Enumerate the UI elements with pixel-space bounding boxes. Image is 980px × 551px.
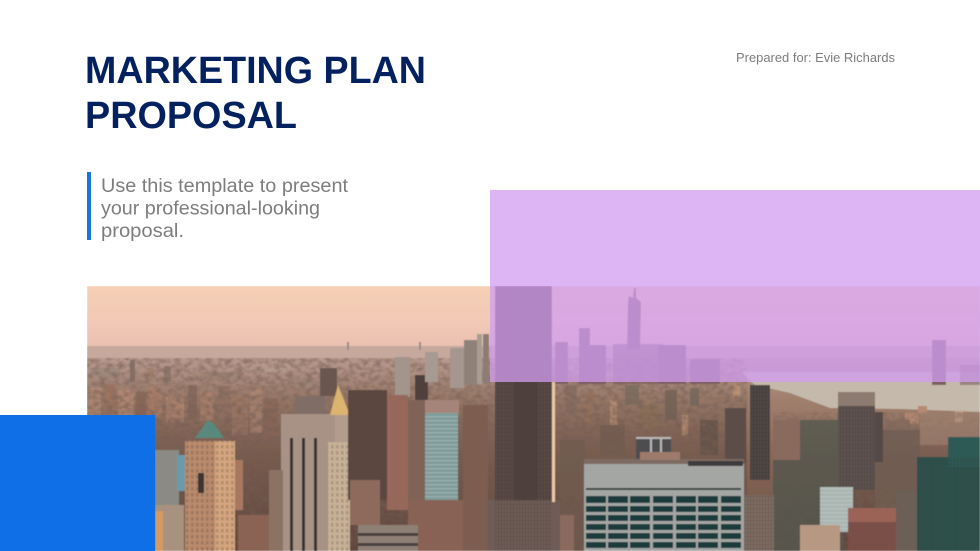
small city clutter: [87, 360, 963, 455]
purple overlay panel: [490, 190, 980, 382]
midtown dark and glass towers: [348, 390, 463, 551]
title line 2: PROPOSAL: [85, 95, 297, 137]
striped skyscraper: [269, 385, 352, 551]
subtitle text: [101, 175, 349, 242]
subtitle line 1: Use this template to present: [101, 175, 349, 197]
office block with window rows: [584, 452, 744, 551]
sky: [87, 286, 980, 348]
title line 1: MARKETING PLAN: [85, 50, 426, 92]
ground shading left: [87, 370, 747, 551]
photo: city skyline: [87, 286, 980, 551]
blue corner block: [0, 415, 155, 551]
skyline buildings behind overlay: [555, 288, 980, 385]
dense city texture: [87, 358, 747, 551]
city ground: [87, 346, 980, 551]
prepared for label: Prepared for: Evie Richards: [736, 50, 895, 65]
title: [85, 50, 426, 137]
mid-distance buildings: [320, 334, 980, 551]
subtitle line 3: proposal.: [101, 220, 184, 242]
river: [740, 372, 980, 412]
right city texture: [773, 412, 980, 551]
right-side towers: [636, 385, 980, 551]
accent bar: [87, 172, 91, 240]
subtitle line 2: your professional-looking: [101, 198, 320, 220]
far haze band: [87, 346, 980, 358]
ground shading right: [773, 412, 980, 551]
art deco tower with green roof: [155, 420, 270, 551]
empire state tower: [487, 286, 574, 551]
